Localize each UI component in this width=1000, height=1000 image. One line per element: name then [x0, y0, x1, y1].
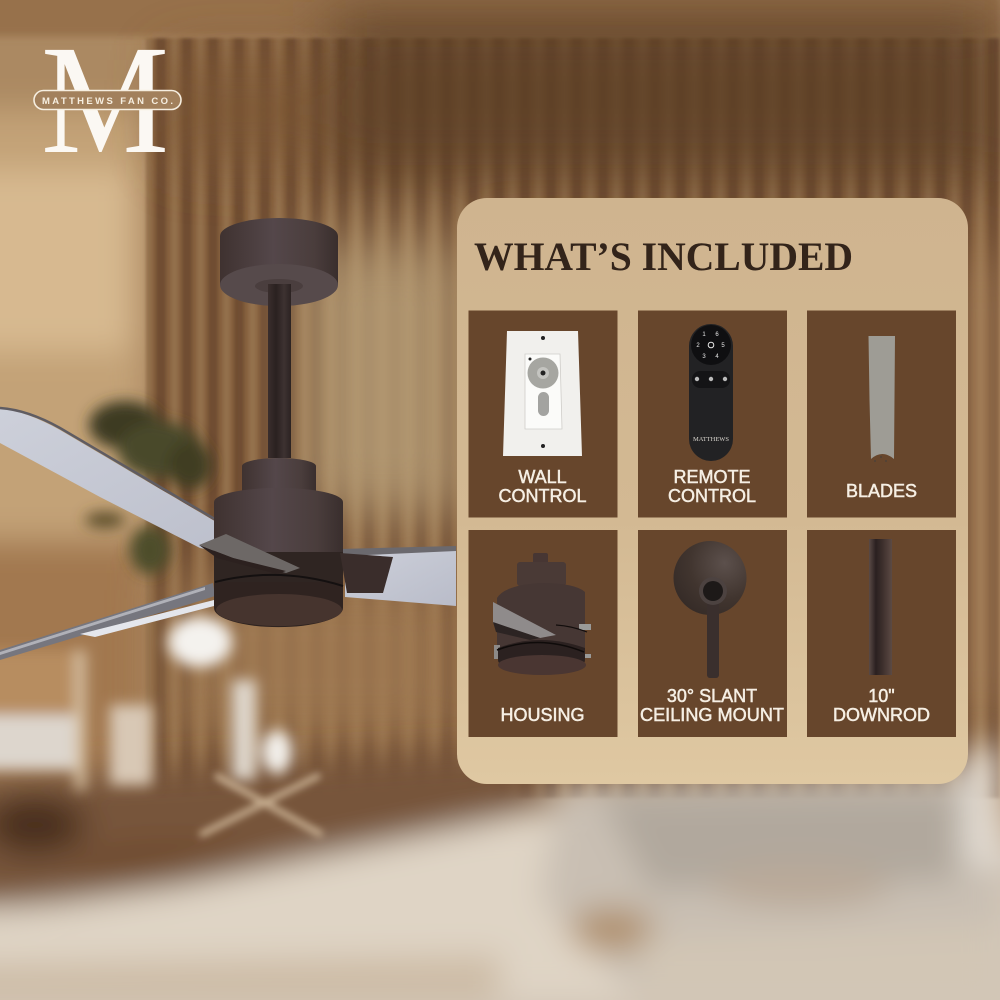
item: housing — [468, 530, 618, 737]
label line 2: CONTROL — [498, 486, 587, 506]
item: wall control — [468, 310, 618, 518]
wood slat wall — [146, 38, 1000, 798]
item: remote control — [638, 310, 787, 518]
icon: remote: 4 — [715, 354, 719, 360]
logo letter M: M — [41, 13, 169, 186]
downrod — [268, 284, 291, 458]
logo name pill — [34, 90, 181, 110]
label: HOUSING — [500, 705, 585, 725]
logo name pill: MATTHEWS FAN CO. — [42, 96, 173, 107]
panel: what's included — [457, 198, 968, 784]
motor collar — [242, 458, 316, 492]
fan blade: lower left — [0, 583, 215, 660]
motor housing — [214, 488, 343, 627]
icon: remote — [689, 324, 733, 461]
label line 2: CONTROL — [668, 486, 756, 506]
icon: remote: 2 — [696, 343, 700, 349]
label: 10" — [868, 686, 895, 706]
item: blades — [807, 310, 956, 518]
panel background — [457, 198, 968, 784]
ceiling canopy — [220, 218, 338, 306]
icon: remote: 6 — [715, 332, 719, 338]
icon: blade — [868, 336, 895, 462]
item: 30 degree slant ceiling mount — [638, 530, 787, 737]
blade bracket: left — [199, 534, 300, 574]
blurred stool legs — [200, 775, 322, 835]
ceiling fan — [0, 218, 456, 660]
icon: remote: 3 — [702, 354, 706, 360]
icon: downrod — [869, 539, 892, 675]
label: 30° SLANT — [667, 686, 757, 706]
logo: Matthews Fan Co. — [34, 13, 181, 186]
icon: remote: 5 — [721, 343, 725, 349]
fan blade: right — [338, 546, 456, 606]
ceiling band — [0, 0, 1000, 36]
blurred plant — [85, 401, 212, 574]
label line 2: DOWNROD — [833, 705, 930, 725]
blade bracket: right — [340, 553, 393, 593]
icon: wall control plate — [503, 331, 582, 456]
floor — [0, 745, 1000, 1000]
heading: WHAT’S INCLUDED — [474, 234, 853, 279]
icon: remote: MATTHEWS — [693, 436, 729, 443]
label: REMOTE — [673, 467, 751, 487]
icon: ceiling mount — [674, 541, 746, 678]
icon: motor housing — [493, 553, 591, 675]
fan blade: upper left — [0, 408, 300, 568]
label: BLADES — [846, 481, 917, 501]
icon: remote: 1 — [702, 332, 706, 338]
label: WALL — [518, 467, 567, 487]
label line 2: CEILING MOUNT — [640, 705, 784, 725]
item: 10 inch downrod — [807, 530, 956, 737]
blurred furniture — [0, 617, 292, 790]
